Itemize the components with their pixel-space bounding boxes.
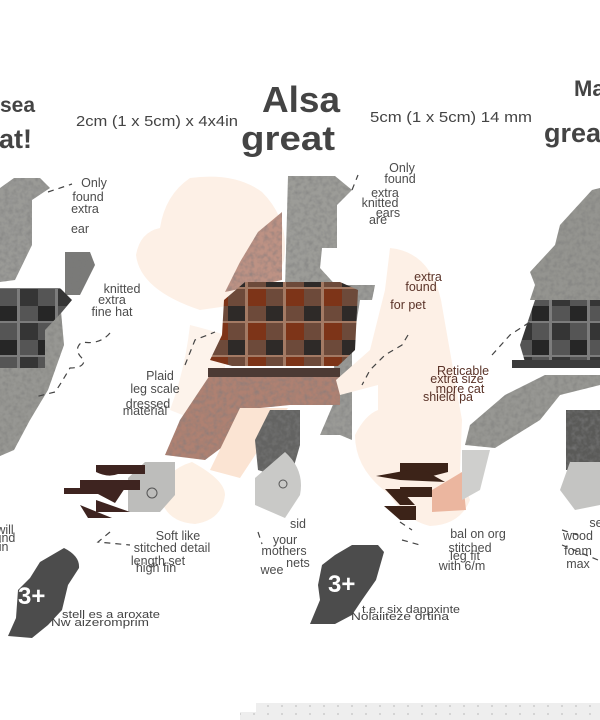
footer dotted band — [240, 703, 600, 720]
callout: center right bottom: stitched — [448, 541, 492, 555]
callout: plush center: leg scale — [130, 382, 180, 396]
callout: ear top center: are — [369, 213, 387, 227]
callout: reticle right: shield pa — [423, 390, 473, 404]
heading: center outfit — [241, 79, 341, 158]
callout: knitted ear left: knitted — [104, 282, 140, 296]
callout: center right bottom: bal on org — [450, 527, 506, 541]
callout: plush center — [123, 332, 215, 418]
bear: center — [128, 176, 375, 524]
callout: far right bottom — [562, 516, 600, 571]
callout: reticle right: Reticable — [437, 364, 489, 378]
shoe stripes: center left — [64, 465, 145, 518]
callout: center bottom: sid — [290, 517, 306, 531]
callout: squiggle center left — [98, 529, 210, 575]
callout: center bottom — [258, 517, 310, 577]
callout: reticle right — [423, 322, 530, 404]
callout: reticle right: extra size — [430, 372, 484, 386]
callout: ear top center: extra — [371, 186, 399, 200]
badge: age 3+ right — [310, 545, 384, 624]
callout: knitted ear left: fine hat — [91, 305, 133, 319]
arrow: left squiggle — [35, 333, 110, 397]
bear: right cream and gray — [336, 188, 600, 526]
callout: center bottom: wee — [260, 563, 284, 577]
heading: left outfit — [0, 94, 35, 154]
callout: squiggle center left: high fin — [136, 561, 176, 575]
callout: ear top left: found — [72, 190, 104, 204]
callout: ear top center: ears — [376, 206, 400, 220]
callout: extra found red — [362, 270, 442, 385]
shoe stripes: right — [376, 463, 448, 520]
badge note: right: t.e.r six dappxinte — [362, 604, 460, 616]
callout: reticle right: more cat — [436, 382, 485, 396]
heading: center outfit: Alsa — [262, 79, 341, 120]
badge: age 3+ right: 3+ — [328, 571, 355, 598]
callout: center right bottom — [400, 522, 506, 573]
badge note: left: stell es a aroxate — [62, 609, 160, 621]
callout: ear top center — [352, 161, 416, 227]
callout: extra found red: extra — [414, 270, 442, 284]
callout: ear top left: Only — [81, 176, 108, 190]
bear: left gray — [0, 178, 95, 456]
callout: squiggle center left: stitched detail — [134, 541, 210, 555]
subtitle: left size: 2cm (1 x 5cm) x 4x4in — [76, 114, 238, 130]
callout: center bottom: nets — [286, 556, 310, 570]
callout: ear top left: extra — [71, 202, 99, 216]
badge note: left — [51, 609, 160, 629]
callout: center bottom: your — [273, 533, 297, 547]
callout: far right bottom: wood — [562, 529, 593, 543]
callout: knitted ear left — [91, 282, 140, 319]
subtitle: right size: 5cm (1 x 5cm) 14 mm — [370, 110, 532, 126]
callout: ear top center: knitted — [362, 196, 398, 210]
callout: center right bottom: with 6/m — [438, 559, 485, 573]
callout: far right bottom: foam — [564, 544, 592, 558]
callout: plush center: material — [123, 404, 167, 418]
badge: age 3+ left — [8, 548, 79, 638]
callout: extra found red: for pet — [390, 298, 426, 312]
callout: ear top center: found — [384, 172, 416, 186]
callout: plush center: Plaid — [146, 369, 174, 383]
callout: knitted ear left: extra — [98, 293, 126, 307]
badge note: left: Nw aizeromprim — [51, 617, 149, 629]
badge note: right — [351, 604, 460, 623]
callout: squiggle center left: length set — [131, 554, 186, 568]
badge note: right: Nolaiiteze ortina — [351, 611, 450, 623]
callout: ear top left — [48, 176, 108, 236]
heading: right outfit — [544, 76, 600, 148]
badge: age 3+ left: 3+ — [18, 583, 45, 610]
callout: ear top left: ear — [71, 222, 89, 236]
callout: extra found red: found — [405, 280, 437, 294]
callout: plush center: dressed — [126, 397, 170, 411]
heading: center outfit: great — [241, 120, 335, 158]
callout: center bottom: mothers — [261, 544, 307, 558]
callout: center right bottom: leg fit — [450, 549, 480, 563]
callout: squiggle center left: Soft like — [156, 529, 200, 543]
callout: ear top center: Only — [389, 161, 416, 175]
callout: far right bottom: max — [566, 557, 591, 571]
callout: bottom left edge — [0, 523, 15, 554]
